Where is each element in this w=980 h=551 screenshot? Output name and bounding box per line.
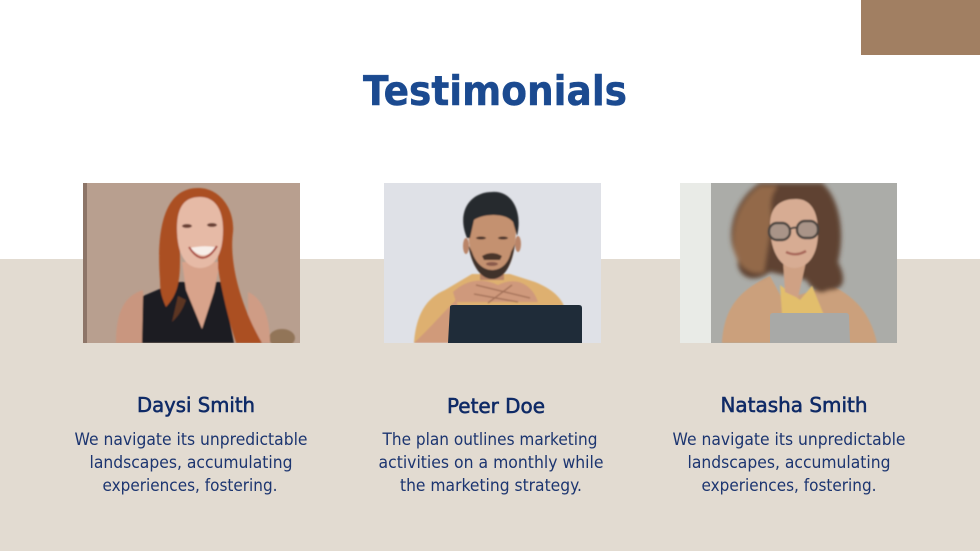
laptop (448, 305, 582, 343)
testimonial: Peter Doe (378, 394, 604, 495)
quote: experiences, fostering. (102, 476, 278, 495)
quote (74, 430, 308, 495)
quote: activities on a monthly while (378, 453, 604, 472)
quote: We navigate its unpredictable (672, 430, 906, 449)
quote: We navigate its unpredictable (74, 430, 308, 449)
quote: The plan outlines marketing (382, 430, 598, 449)
title: Testimonials (363, 67, 627, 115)
corner accent block (861, 0, 980, 55)
name: Peter Doe (447, 394, 545, 418)
quote: experiences, fostering. (702, 476, 876, 495)
beige lower band (0, 259, 980, 551)
quote (378, 430, 604, 495)
quote: the marketing strategy. (400, 476, 582, 495)
testimonial: Natasha Smith (672, 393, 906, 495)
photo: Daysi Smith (83, 183, 300, 347)
photo: Natasha Smith (680, 183, 897, 343)
testimonial: Daysi Smith (74, 393, 308, 495)
quote: landscapes, accumulating (688, 453, 890, 472)
name: Natasha Smith (720, 393, 868, 417)
quote (672, 430, 906, 495)
name: Daysi Smith (137, 393, 255, 417)
laptop (770, 313, 850, 343)
photo: Peter Doe (384, 183, 601, 343)
quote: landscapes, accumulating (90, 453, 292, 472)
